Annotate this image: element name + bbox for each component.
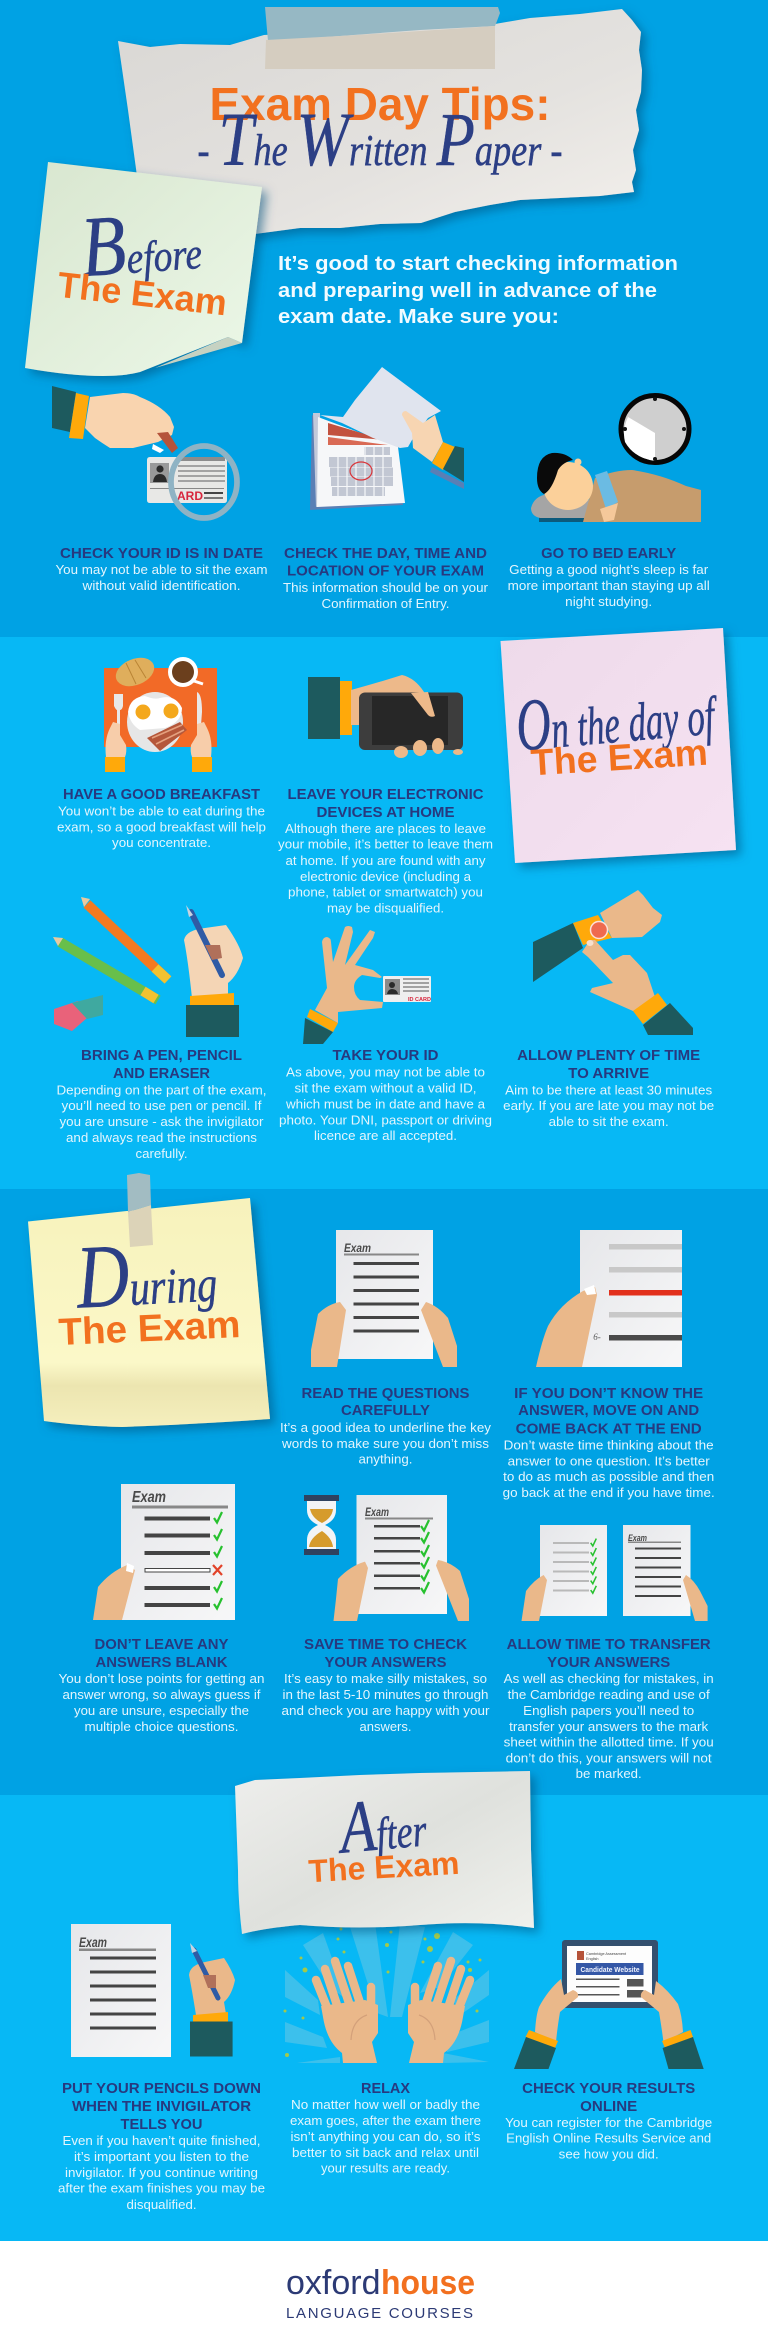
heading: ALLOW TIME TO TRANSFER xyxy=(507,1637,711,1653)
icon: hand pointing at wristwatch xyxy=(533,890,693,1035)
description xyxy=(56,1082,266,1161)
description: You don’t lose points for getting an xyxy=(58,1671,264,1686)
heading: LOCATION OF YOUR EXAM xyxy=(287,564,484,580)
description: answers. xyxy=(360,1719,412,1734)
intro text: and preparing well in advance of the xyxy=(278,280,657,302)
heading: IF YOU DON’T KNOW THE xyxy=(514,1386,704,1402)
heading: the exam: The Exam xyxy=(56,264,229,323)
description: licence are all accepted. xyxy=(314,1128,457,1143)
heading xyxy=(302,1386,470,1419)
heading xyxy=(288,787,484,821)
description xyxy=(290,2097,481,2176)
description: early. If you are late you may not be xyxy=(503,1098,714,1113)
heading xyxy=(304,1637,468,1671)
heading: TAKE YOUR ID xyxy=(332,1048,438,1064)
heading: COME BACK AT THE END xyxy=(516,1422,702,1438)
description: may be disqualified. xyxy=(327,900,444,916)
panel: after the exam xyxy=(58,1771,712,2212)
description: without valid identification. xyxy=(81,578,240,593)
script: before: Before xyxy=(78,191,204,295)
heading: DON’T LEAVE ANY xyxy=(94,1637,229,1653)
icon: exam paper and hand with pen: Exam xyxy=(79,1934,107,1950)
logo: oxford house language courses xyxy=(286,2264,475,2322)
intro text: It’s good to start checking information xyxy=(278,253,678,275)
description: transfer your answers to the mark xyxy=(509,1719,709,1734)
tip: save time to check xyxy=(282,1495,490,1734)
icon: pencils, eraser and hand with pen xyxy=(53,897,243,1037)
intro text xyxy=(278,253,678,328)
heading: DEVICES AT HOME xyxy=(316,805,455,821)
description: and always read the instructions xyxy=(66,1130,258,1145)
icon: two exam papers and hands: Exam xyxy=(628,1533,647,1543)
description: Depending on the part of the exam, xyxy=(56,1082,266,1097)
description xyxy=(279,1064,492,1143)
tip: if you don't know the answer xyxy=(503,1230,715,1500)
heading xyxy=(284,546,487,580)
icon: raised hands with rays xyxy=(284,1923,489,2063)
description: answer wrong, so always guess if xyxy=(62,1687,261,1702)
description: It’s a good idea to underline the key xyxy=(280,1420,491,1435)
panel: during the exam xyxy=(28,1173,715,1781)
icon: hands holding exam paper xyxy=(311,1230,457,1367)
panel: title and before the exam xyxy=(25,7,710,611)
icon: hands holding tablet: Candidate Website xyxy=(580,1965,640,1974)
heading: CHECK YOUR ID IS IN DATE xyxy=(60,546,263,562)
tip: leave devices at home xyxy=(278,675,493,916)
description: and check you are happy with your xyxy=(282,1703,490,1718)
tip: bring a pen, pencil and eraser xyxy=(53,897,266,1161)
heading: AND ERASER xyxy=(113,1066,211,1082)
description xyxy=(505,2115,712,2162)
icon: hands holding tablet: English xyxy=(586,1957,598,1961)
description: You won’t be able to eat during the xyxy=(58,804,265,818)
description: Getting a good night’s sleep is far xyxy=(509,562,709,577)
script: after: After xyxy=(333,1780,430,1870)
icon: calendar and hand xyxy=(310,367,464,510)
tip: take your id xyxy=(279,926,492,1143)
description: your mobile, it’s better to leave them xyxy=(278,836,493,852)
description: invigilator. If you continue writing xyxy=(65,2165,258,2180)
description: carefully. xyxy=(136,1146,188,1161)
description: to do as much as possible and then xyxy=(503,1469,714,1484)
description: after the exam finishes you may be xyxy=(58,2181,265,2196)
heading: the exam: The Exam xyxy=(530,732,709,783)
logo: oxford house language courses: oxford xyxy=(286,2264,380,2302)
heading: CAREFULLY xyxy=(341,1403,430,1419)
description: phone, tablet or smartwatch) you xyxy=(288,884,483,900)
description: words to make sure you don’t miss xyxy=(281,1436,490,1451)
heading: ONLINE xyxy=(580,2099,638,2115)
description: you concentrate. xyxy=(112,835,211,850)
tip: relax xyxy=(284,1923,489,2176)
description: English papers you’ll need to xyxy=(523,1703,694,1718)
description: sit the exam without a valid ID, xyxy=(294,1080,476,1096)
icon: exam paper with checks and cross: Exam xyxy=(132,1489,166,1506)
heading: CHECK THE DAY, TIME AND xyxy=(284,546,487,562)
heading: YOUR ANSWERS xyxy=(324,1655,447,1671)
description: Although there are places to leave xyxy=(285,821,486,836)
description: you are unsure, especially the xyxy=(74,1703,249,1718)
icon: sleeper and clock xyxy=(531,396,701,522)
description: exam, so a good breakfast will help xyxy=(57,820,266,834)
description xyxy=(282,1671,490,1734)
description: Aim to be there at least 30 minutes xyxy=(505,1082,713,1097)
tip: don't leave any answers blank xyxy=(58,1484,264,1734)
tip: check the day xyxy=(283,367,489,611)
description: be marked. xyxy=(576,1766,642,1781)
logo: oxford house language courses: house xyxy=(381,2264,475,2302)
heading: PUT YOUR PENCILS DOWN xyxy=(62,2081,261,2097)
heading: ALLOW PLENTY OF TIME xyxy=(517,1048,701,1064)
description xyxy=(58,2133,265,2212)
heading: TO ARRIVE xyxy=(568,1066,650,1082)
script: during: During xyxy=(72,1221,219,1328)
description: don’t do this, your answers will not xyxy=(506,1750,712,1766)
icon: hands holding exam paper: Exam xyxy=(344,1241,371,1255)
tape strip xyxy=(127,1173,153,1247)
description: isn’t anything you can do, so it’s xyxy=(290,2129,481,2144)
tip: put your pencils down xyxy=(58,1924,265,2212)
description: in the last 5-10 minutes go through xyxy=(282,1687,488,1702)
description: No matter how well or badly the xyxy=(291,2097,480,2112)
description: see how you did. xyxy=(559,2147,659,2162)
description xyxy=(283,580,489,611)
sticky note: during the exam xyxy=(28,1173,270,1427)
description: electronic device (including a xyxy=(300,869,472,884)
description: photo. Your DNI, passport or driving xyxy=(279,1112,492,1128)
description: able to sit the exam. xyxy=(549,1114,669,1129)
tip: go to bed early xyxy=(508,396,710,609)
description: answer to one question. It’s better xyxy=(508,1454,710,1468)
icon: hand holding phone xyxy=(308,675,463,758)
icon: hand holding id card: ID CARD xyxy=(408,997,431,1003)
description: go back at the end if you have time. xyxy=(503,1485,715,1500)
heading: ANSWER, MOVE ON AND xyxy=(518,1403,699,1419)
heading xyxy=(81,1048,242,1082)
description: more important than staying up all xyxy=(508,578,710,593)
heading xyxy=(62,2081,261,2133)
heading xyxy=(514,1386,704,1438)
heading xyxy=(522,2081,696,2115)
description xyxy=(508,562,710,609)
heading: the exam: The Exam xyxy=(58,1304,241,1354)
icon: two exam papers and hands xyxy=(522,1525,708,1621)
description: Confirmation of Entry. xyxy=(322,596,450,611)
description: anything. xyxy=(358,1452,412,1466)
description: As above, you may not be able to xyxy=(286,1064,485,1080)
heading: GO TO BED EARLY xyxy=(541,546,677,562)
icon: hourglass and exam paper: Exam xyxy=(365,1505,389,1519)
icon: hourglass and exam paper xyxy=(304,1495,469,1621)
icon: hand holding paper with highlighted line: 6- xyxy=(593,1332,601,1342)
title: exam day tips: Exam Day Tips: xyxy=(210,78,550,130)
paper note: after the exam xyxy=(235,1771,534,1934)
description: As well as checking for mistakes, in xyxy=(504,1671,714,1686)
icon: hand with magnifier over id card xyxy=(52,386,237,518)
description: it’s important you listen to the xyxy=(74,2149,249,2164)
heading: TELLS YOU xyxy=(120,2117,202,2133)
heading: SAVE TIME TO CHECK xyxy=(304,1637,468,1653)
heading xyxy=(94,1637,229,1671)
icon: hands holding tablet: Cambridge Assessment xyxy=(586,1952,627,1956)
sticky note: on the day of the exam xyxy=(500,628,736,863)
tip: have a good breakfast xyxy=(57,652,266,850)
icon: hands holding tablet xyxy=(514,1940,704,2069)
description: You may not be able to sit the exam xyxy=(56,562,268,577)
description: the Cambridge reading and use of xyxy=(508,1687,710,1702)
heading: the exam: The Exam xyxy=(307,1845,460,1889)
description: Don’t waste time thinking about the xyxy=(504,1438,714,1453)
logo: oxford house language courses: LANGUAGE COURSES xyxy=(286,2305,473,2322)
tape strip xyxy=(265,7,500,69)
description xyxy=(504,1671,714,1781)
heading: READ THE QUESTIONS xyxy=(302,1386,470,1402)
tip: check your results online xyxy=(505,1940,712,2162)
heading: HAVE A GOOD BREAKFAST xyxy=(63,787,260,803)
description xyxy=(503,1438,715,1500)
tip: allow plenty of time xyxy=(503,890,714,1129)
description: you are unsure - ask the invigilator xyxy=(60,1114,264,1129)
description: exam goes, after the exam there xyxy=(290,2113,481,2128)
heading: ANSWERS BLANK xyxy=(96,1655,228,1671)
description xyxy=(58,1671,264,1734)
heading xyxy=(517,1048,701,1082)
description: disqualified. xyxy=(126,2197,196,2212)
description: English Online Results Service and xyxy=(506,2130,711,2146)
description xyxy=(280,1420,491,1466)
description: you’ll need to use pen or pencil. If xyxy=(62,1098,262,1113)
description xyxy=(503,1082,714,1129)
description: which must be in date and have a xyxy=(285,1096,486,1112)
heading xyxy=(507,1637,711,1671)
heading: YOUR ANSWERS xyxy=(547,1655,671,1671)
icon: hand holding paper with highlighted line xyxy=(536,1230,682,1367)
description xyxy=(57,804,266,850)
description: You can register for the Cambridge xyxy=(505,2115,712,2130)
description xyxy=(56,562,268,593)
description: night studying. xyxy=(565,594,652,609)
description: sheet within the allotted time. If you xyxy=(504,1735,714,1750)
heading: CHECK YOUR RESULTS xyxy=(522,2081,696,2097)
tip: read the questions xyxy=(280,1230,491,1466)
description xyxy=(278,821,493,916)
subtitle: the written paper: - The Written Paper - xyxy=(198,98,562,182)
tip: allow time to transfer xyxy=(504,1525,714,1781)
tip: check your id xyxy=(52,386,268,593)
icon: hand holding id card xyxy=(303,926,431,1044)
torn paper title card xyxy=(118,7,642,234)
icon: exam paper and hand with pen xyxy=(71,1924,235,2057)
description: your results are ready. xyxy=(321,2161,450,2176)
description: better to sit back and relax until xyxy=(292,2145,479,2160)
description: multiple choice questions. xyxy=(84,1719,238,1734)
heading: RELAX xyxy=(361,2081,410,2097)
heading: BRING A PEN, PENCIL xyxy=(81,1048,242,1064)
heading: LEAVE YOUR ELECTRONIC xyxy=(288,787,484,803)
description: It’s easy to make silly mistakes, so xyxy=(284,1671,487,1686)
description: Even if you haven’t quite finished, xyxy=(62,2133,260,2148)
description: at home. If you are found with any xyxy=(286,853,486,868)
panel: on the day of the exam xyxy=(53,628,736,1161)
intro text: exam date. Make sure you: xyxy=(278,306,559,328)
sticky note: before the exam xyxy=(25,162,262,376)
heading: WHEN THE INVIGILATOR xyxy=(72,2099,252,2115)
icon: breakfast plate xyxy=(104,652,217,772)
icon: exam paper with checks and cross xyxy=(93,1484,235,1620)
icon: hand with magnifier over id card: ARD xyxy=(177,489,203,503)
description: This information should be on your xyxy=(283,580,489,595)
